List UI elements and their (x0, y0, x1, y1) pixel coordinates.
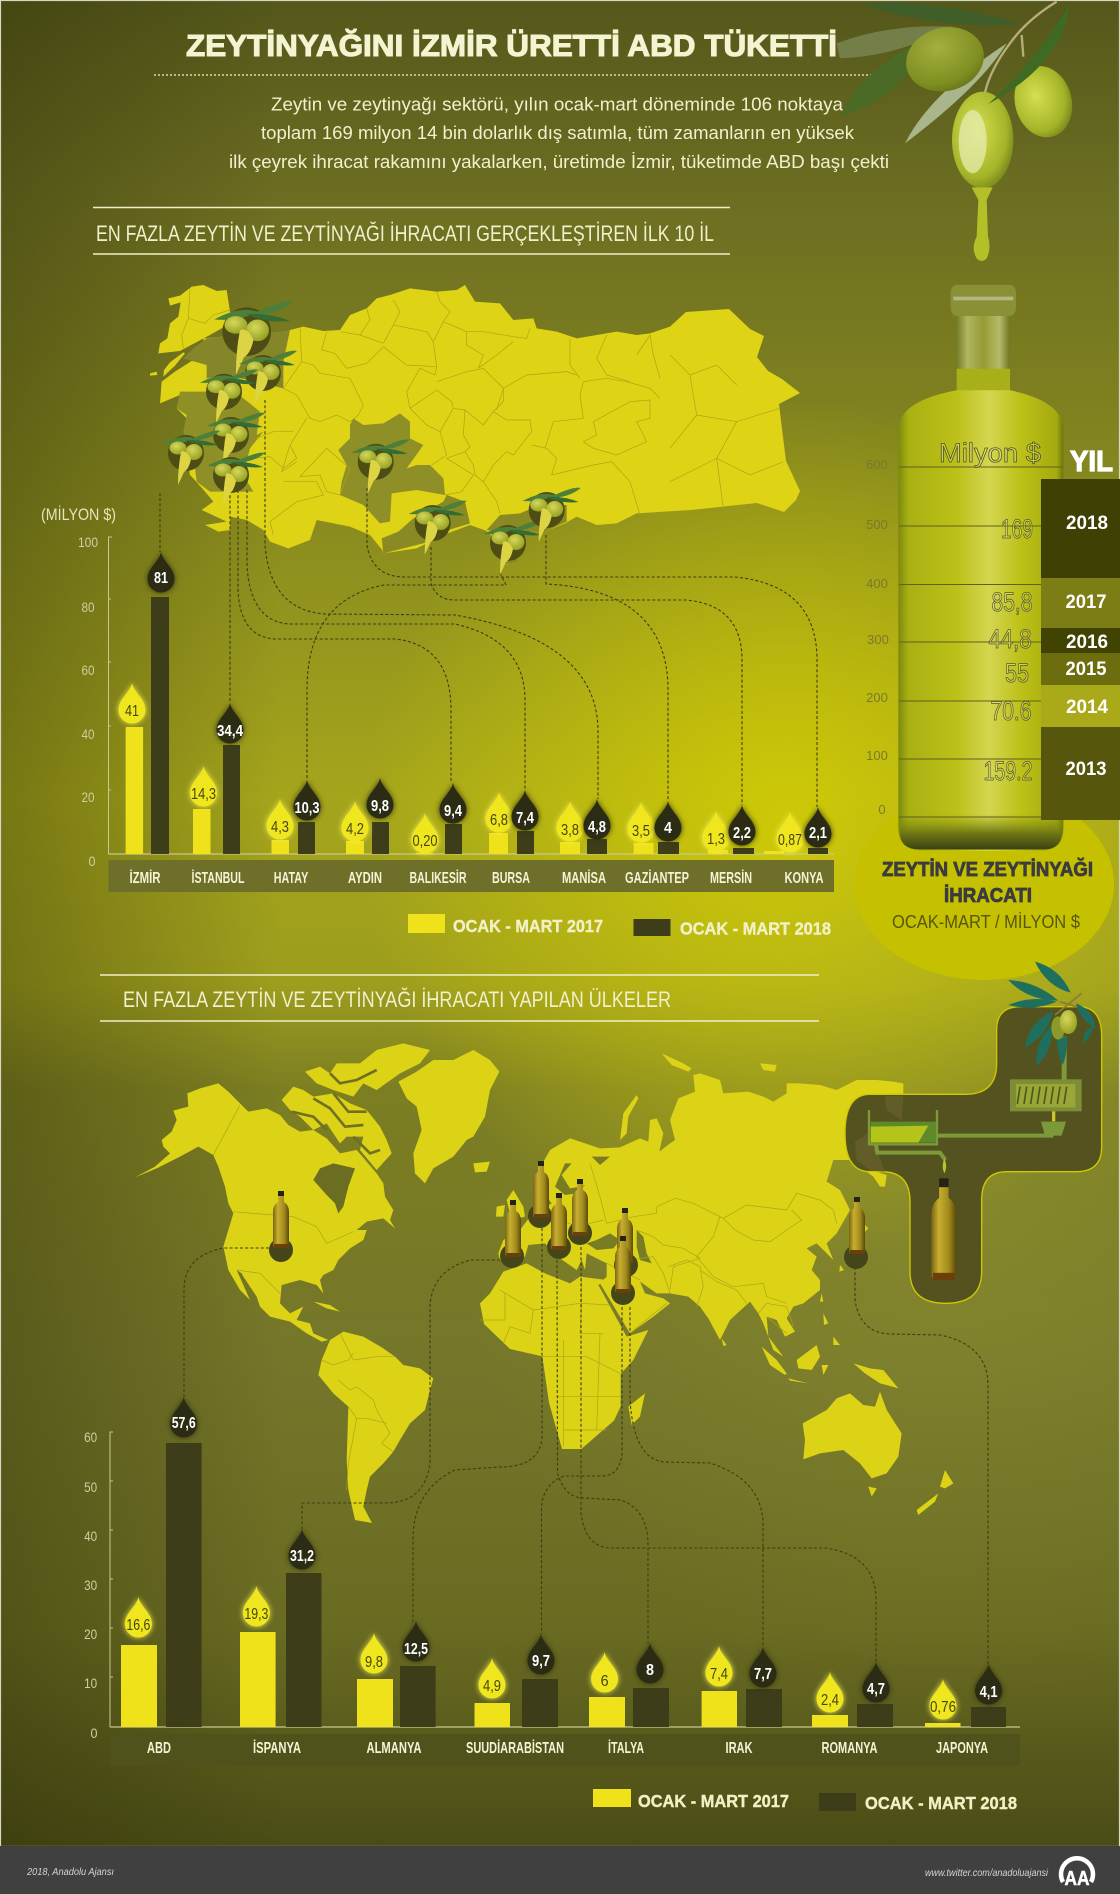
scale labels: 100 (866, 748, 888, 763)
year labels: 2013 (1066, 759, 1106, 780)
intro text: ilk çeyrek ihracat rakamını yakalarken, üretimde İzmir, tüketimde ABD başı çekti (229, 152, 889, 172)
New Zealand (917, 1470, 953, 1515)
group: Mersin: 2,2 (733, 825, 751, 842)
oil drop (943, 1158, 946, 1173)
group: İstanbul: İSTANBUL (192, 870, 244, 887)
group: Bursa: 7,4 (516, 810, 534, 827)
group: Romanya: 2,4 (821, 1692, 839, 1709)
scale labels: 300 (867, 632, 889, 647)
group: Japonya: 4,1 (980, 1684, 998, 1701)
scale labels (866, 457, 889, 817)
chart: provinces (41, 505, 834, 938)
axis: 30 (84, 1577, 97, 1593)
year labels (1066, 446, 1113, 780)
group: Balıkesir: BALIKESİR (410, 870, 466, 887)
bottle: Romanya (568, 1179, 592, 1245)
axis ticks: 20 (82, 789, 95, 805)
bottle: Irak (614, 1208, 638, 1277)
Caribbean (313, 1302, 340, 1312)
province connectors (160, 400, 817, 807)
group: Manisa: 4,8 (588, 819, 606, 836)
borders Americas (213, 1105, 395, 1490)
baseline (108, 853, 834, 855)
group: Irak: IRAK (726, 1740, 753, 1757)
panel: olive oil process (845, 962, 1102, 1303)
group: Almanya: ALMANYA (366, 1740, 422, 1757)
group: Balıkesir: 9,4 (444, 803, 462, 820)
group: Japonya (925, 1664, 1006, 1757)
year labels: YIL (1070, 446, 1113, 478)
group: Aydın: AYDIN (348, 870, 382, 887)
group: Mersin: 1,3 (707, 831, 725, 848)
intro text (229, 94, 889, 172)
axis: 0 (90, 1725, 98, 1741)
group: İstanbul: 34,4 (217, 723, 243, 740)
Africa (480, 1263, 648, 1449)
group: İspanya (240, 1529, 322, 1757)
axis ticks: 0 (88, 853, 96, 869)
group: Gaziantep: 4 (664, 820, 672, 837)
group: Irak: 7,7 (754, 1666, 772, 1683)
group: Almanya: 12,5 (404, 1641, 428, 1658)
bottle: İtalya (547, 1193, 571, 1259)
country connectors (184, 1228, 988, 1664)
axis: 50 (84, 1479, 97, 1495)
unit label: Milyon $ (939, 438, 1041, 468)
big bottle (931, 1178, 956, 1280)
press (1010, 1037, 1082, 1121)
bottle caption: OCAK-MART / MİLYON $ (892, 912, 1080, 932)
intro text: toplam 169 milyon 14 bin dolarlık dış satımla, tüm zamanların en yüksek (261, 123, 855, 143)
group: İzmir (118, 552, 174, 887)
group: ABD (121, 1397, 202, 1757)
group: Hatay: 10,3 (294, 800, 320, 817)
yellow oil pool (854, 788, 1114, 980)
group: Gaziantep: GAZİANTEP (625, 870, 689, 887)
axis ticks: 40 (82, 726, 95, 742)
scale labels: 600 (866, 457, 888, 472)
axis: 10 (84, 1675, 97, 1691)
group: Irak: 7,4 (710, 1666, 728, 1683)
scale labels: 400 (866, 576, 888, 591)
axis: 60 (84, 1429, 97, 1445)
Madagascar (628, 1393, 645, 1425)
group: ABD: 57,6 (172, 1415, 196, 1432)
group: Suudi Arabistan: 4,9 (483, 1678, 501, 1695)
olive sprig (1008, 962, 1095, 1066)
group: Suudi Arabistan: 9,7 (532, 1653, 550, 1670)
group: Konya: KONYA (784, 870, 824, 887)
bottle: Japonya (844, 1197, 868, 1269)
year bands (1041, 479, 1120, 820)
category strip (110, 1734, 1020, 1766)
group: Hatay: 4,3 (271, 819, 289, 836)
map: world (135, 1043, 953, 1523)
bottle: İspanya (500, 1200, 524, 1268)
bottle values: 85,8 (992, 587, 1032, 617)
bottle: Suudi Arabistan (611, 1236, 635, 1305)
scale labels: 500 (866, 517, 888, 532)
inland seas (555, 1157, 652, 1263)
axis label: (MİLYON $) (41, 505, 116, 524)
group: İzmir: 41 (125, 703, 139, 720)
North America (135, 1083, 395, 1342)
group: İtalya: İTALYA (608, 1740, 644, 1757)
year labels: 2017 (1066, 592, 1106, 613)
group: Konya: 0,87 (778, 832, 802, 849)
axis ticks: 80 (82, 599, 95, 615)
group: Hatay: HATAY (274, 870, 309, 887)
group: Manisa: 3,8 (561, 822, 579, 839)
category strip (108, 860, 834, 892)
group: İzmir: 81 (154, 570, 168, 587)
axis ticks (78, 534, 112, 869)
group: Bursa: BURSA (492, 870, 530, 887)
group: Almanya (357, 1621, 436, 1757)
group: Suudi Arabistan (466, 1634, 564, 1757)
group: Romanya (812, 1662, 893, 1757)
group: Manisa (556, 799, 610, 887)
legend: OCAK - MART 2018 (865, 1793, 1017, 1813)
Greenland (398, 1050, 499, 1183)
group: Aydın (342, 778, 394, 887)
panel shape (845, 1007, 1102, 1303)
social link: www.twitter.com/anadoluajansi (925, 1867, 1049, 1879)
bottle values: 70.6 (990, 696, 1032, 726)
bottle values: 55 (1005, 658, 1029, 688)
icon: olive branch with dripping olive (837, 2, 1080, 261)
group: Gaziantep: 3,5 (632, 823, 650, 840)
scale labels: 200 (866, 690, 888, 705)
divider: dotted (154, 74, 883, 76)
icon: AA logo: AA (1064, 1868, 1090, 1890)
group: Gaziantep (625, 801, 689, 887)
icon: glass bottle (898, 285, 1063, 851)
bottle values: 169 (1001, 514, 1033, 544)
group: Bursa: 6,8 (490, 812, 508, 829)
legend (408, 914, 831, 938)
Arctic Canada (282, 1087, 392, 1170)
group: Suudi Arabistan: SUUDİARABİSTAN (466, 1740, 564, 1757)
footer (0, 1846, 1120, 1894)
group: Japonya: JAPONYA (936, 1740, 988, 1757)
group: Balıkesir (410, 783, 466, 887)
group: Aydın: 4,2 (346, 821, 364, 838)
group: ABD: ABD (147, 1740, 171, 1757)
bottle: Almanya (528, 1161, 552, 1228)
group: Konya (764, 807, 832, 887)
bottle values: 159.2 (984, 756, 1032, 786)
group: Irak (702, 1646, 782, 1757)
panel: bottle export chart (854, 285, 1120, 980)
South America (318, 1332, 433, 1523)
group: Aydın: 9,8 (371, 798, 389, 815)
axis: 40 (84, 1528, 97, 1544)
axis ticks: 100 (78, 534, 98, 550)
section heading: top 10 provinces: EN FAZLA ZEYTİN VE ZEYTİNYAĞI İHRACATI GERÇEKLEŞTİREN İLK 10 İL (96, 221, 714, 246)
pipes (876, 1136, 1053, 1160)
bowl (1041, 1122, 1066, 1136)
bottle caption: ZEYTİN VE ZEYTİNYAĞI (882, 857, 1093, 881)
Iceland (473, 1162, 490, 1172)
borders Eurasia and Africa (480, 1163, 837, 1447)
Hudson Bay (313, 1163, 355, 1213)
group: Almanya: 9,8 (365, 1654, 383, 1671)
group: Romanya: ROMANYA (822, 1740, 878, 1757)
icon: AA logo (1061, 1858, 1093, 1890)
islands (496, 1053, 898, 1388)
bottle: ABD (269, 1191, 293, 1262)
baseline (110, 1726, 1020, 1728)
group: İzmir: İZMİR (130, 870, 160, 887)
year labels: 2018 (1066, 513, 1108, 534)
tank (869, 1110, 937, 1144)
Eurasia (498, 1073, 903, 1357)
legend (593, 1789, 1017, 1813)
faint map under panel (855, 1096, 903, 1172)
bottle values (984, 514, 1033, 786)
bottle caption (882, 857, 1093, 932)
group: Balıkesir: 0,20 (412, 833, 438, 850)
axis ticks: 60 (82, 662, 95, 678)
group: İspanya: 31,2 (290, 1548, 314, 1565)
axis: 20 (84, 1626, 97, 1642)
intro text: Zeytin ve zeytinyağı sektörü, yılın ocak-mart döneminde 106 noktaya (271, 94, 844, 114)
Australia (803, 1392, 902, 1478)
title: ZEYTİNYAĞINI İZMİR ÜRETTİ ABD TÜKETTİ (186, 28, 837, 63)
scale lines (899, 467, 1063, 817)
Canadian Arctic islands (305, 1043, 430, 1097)
group: Manisa: MANİSA (562, 870, 606, 887)
group: Bursa (486, 790, 538, 887)
legend: OCAK - MART 2017 (453, 916, 603, 936)
chart: countries (84, 1397, 1020, 1813)
year labels: 2014 (1066, 697, 1108, 718)
group: İtalya: 8 (646, 1662, 654, 1679)
legend: OCAK - MART 2018 (680, 918, 831, 938)
section heading: countries: EN FAZLA ZEYTİN VE ZEYTİNYAĞI İHRACATI YAPILAN ÜLKELER (123, 987, 671, 1012)
group: İspanya: 19,3 (244, 1606, 268, 1623)
group: Japonya: 0,76 (930, 1699, 956, 1716)
map: Eurasia, Africa, Oceania (480, 1053, 953, 1515)
group: Hatay (266, 780, 320, 887)
country bottles on map (269, 1161, 868, 1305)
group: Mersin (702, 805, 756, 887)
Tasmania (868, 1487, 877, 1497)
group: İstanbul (190, 703, 244, 887)
legend: OCAK - MART 2017 (638, 1791, 789, 1811)
scale labels: 0 (878, 802, 886, 817)
group: ABD: 16,6 (126, 1617, 150, 1634)
bottle caption: İHRACATI (944, 884, 1032, 907)
map: Americas and Greenland (135, 1043, 499, 1523)
group: İspanya: İSPANYA (253, 1740, 301, 1757)
year labels: 2016 (1066, 632, 1108, 653)
map: Turkey (150, 285, 800, 565)
group: Mersin: MERSİN (710, 870, 752, 887)
copyright: 2018, Anadolu Ajansı (26, 1866, 114, 1878)
bottle values: 44,8 (988, 624, 1032, 654)
group: Romanya: 4,7 (867, 1681, 885, 1698)
group: İstanbul: 14,3 (191, 786, 216, 803)
year labels: 2015 (1066, 659, 1107, 680)
axis (84, 1429, 113, 1741)
group: İtalya (589, 1643, 669, 1757)
group: İtalya: 6 (601, 1673, 609, 1690)
Arctic channels (292, 1070, 380, 1153)
group: Konya: 2,1 (809, 825, 827, 842)
olive markers on Turkey map (162, 302, 581, 575)
